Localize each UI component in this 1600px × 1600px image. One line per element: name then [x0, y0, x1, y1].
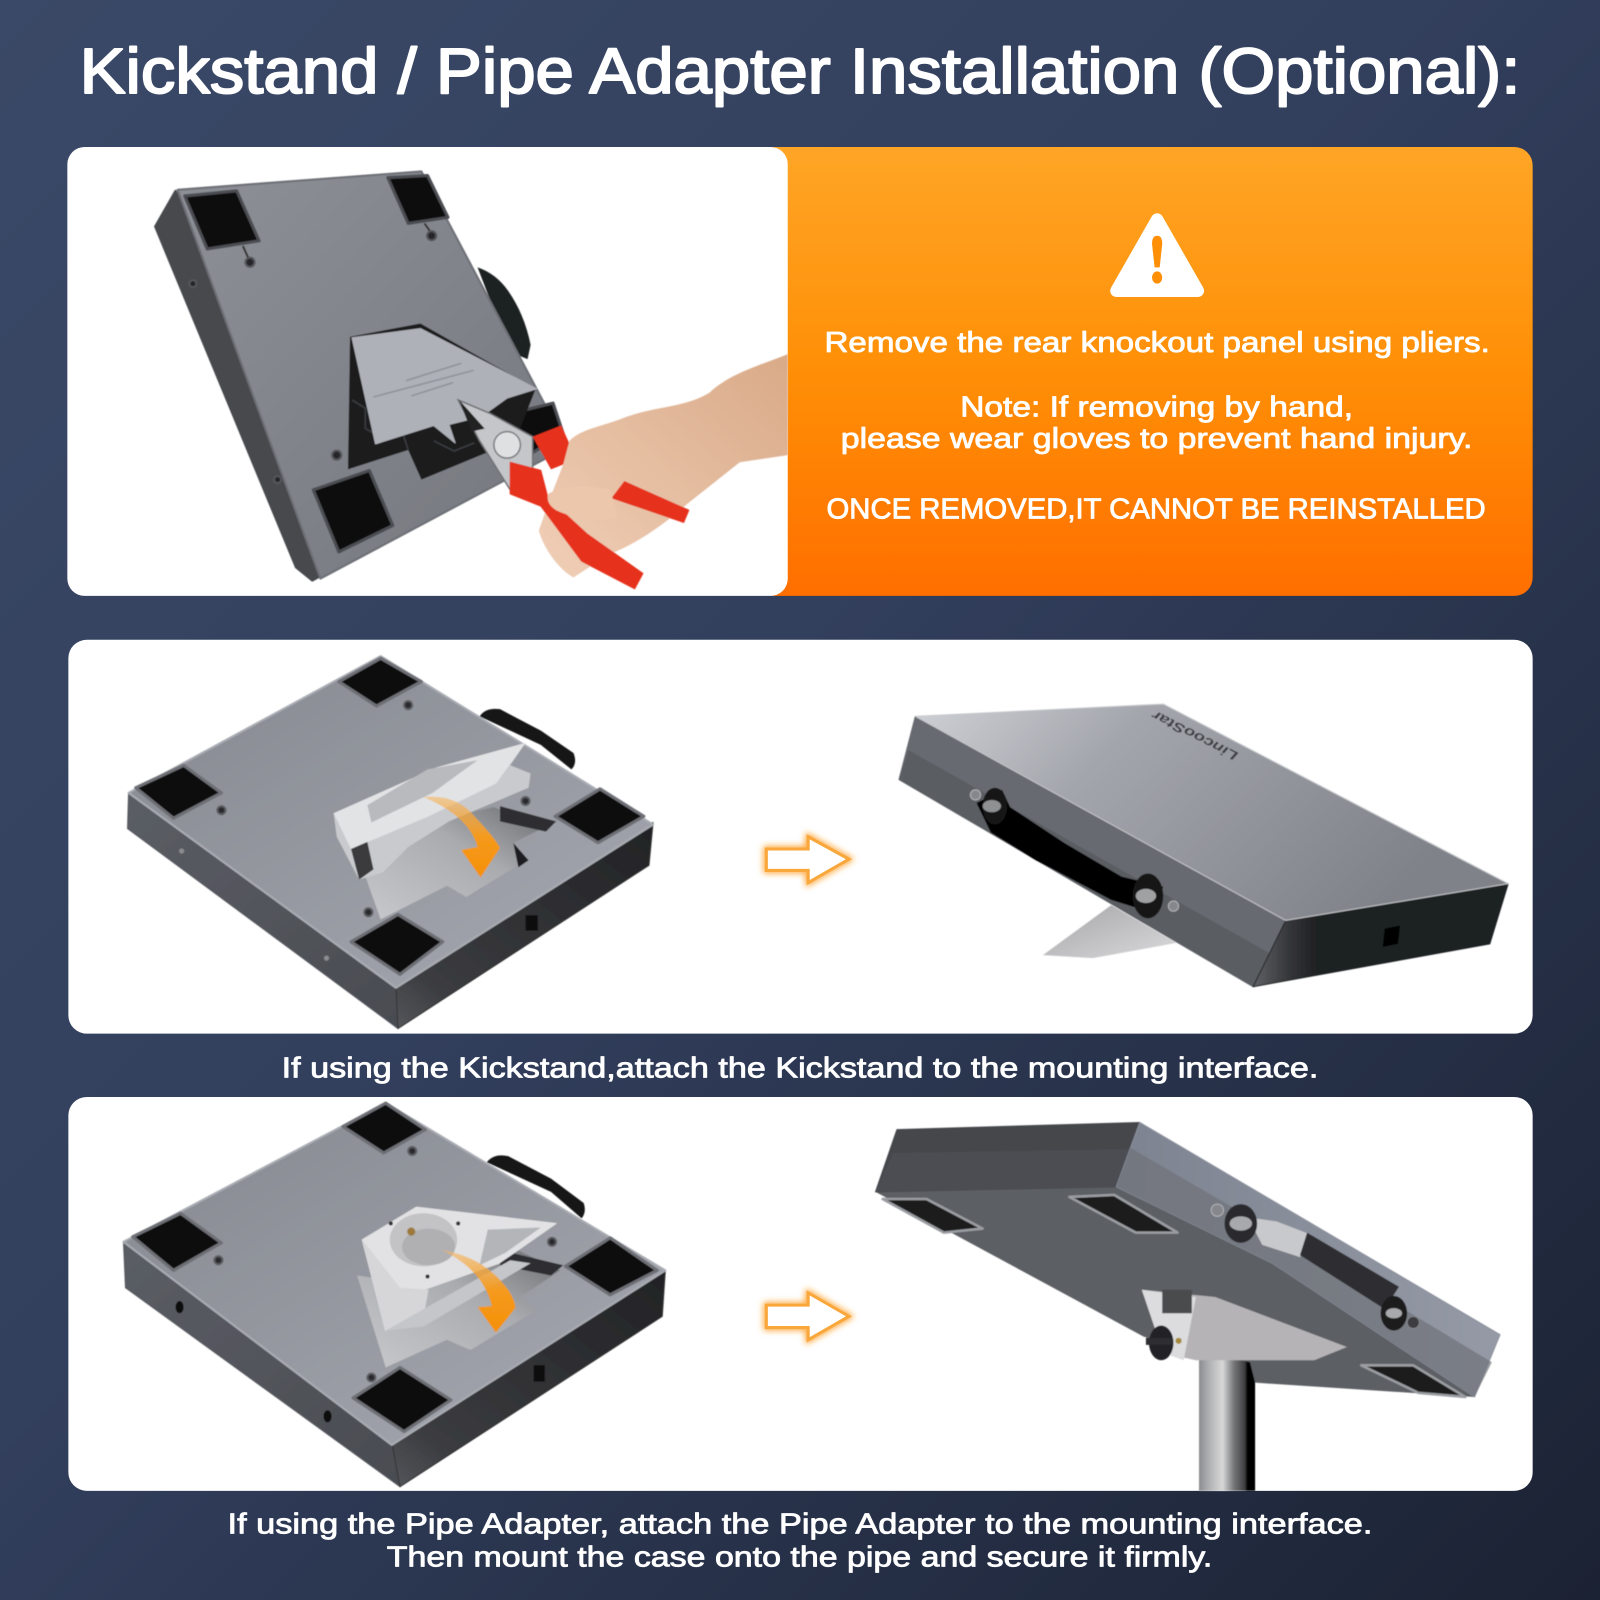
- white panel: [68, 640, 1533, 1034]
- case left side: [123, 1242, 400, 1487]
- panel: knockout removal: [67, 147, 788, 596]
- mount opening: [357, 1250, 560, 1367]
- screw holes: [214, 1147, 556, 1382]
- carry handle: [487, 1155, 585, 1218]
- rear opening: [348, 323, 536, 480]
- kickstand: [334, 743, 531, 880]
- flap embossed lines: [373, 363, 473, 397]
- adapter slot: [480, 1228, 541, 1265]
- adapter on pipe: [1142, 1290, 1347, 1360]
- carry strap: [1248, 1217, 1311, 1257]
- strap bolts: [970, 788, 1179, 918]
- hex pattern: [352, 400, 474, 451]
- screw holes: [217, 701, 530, 916]
- case top face: [915, 704, 1508, 920]
- case face: [129, 656, 653, 988]
- strap bolts: [1211, 1204, 1419, 1331]
- rubber pads: [136, 658, 644, 974]
- case front side: [899, 716, 1286, 987]
- carry handle: [480, 709, 575, 769]
- case end side: [1253, 884, 1508, 987]
- orange warning background: [755, 147, 1533, 596]
- device: case on pipe: [876, 1122, 1500, 1491]
- caption: kickstand: If using the Kickstand,attach the Kickstand to the mounting interface.: [282, 1053, 1318, 1085]
- locking knob: [1146, 1326, 1182, 1360]
- device: kickstand being attached: [128, 656, 653, 1029]
- kickstand leg: [1043, 905, 1177, 958]
- pliers head: [458, 400, 533, 490]
- pliers upper handle head: [533, 426, 577, 469]
- pipe adapter bracket: [362, 1207, 556, 1331]
- white panel: [68, 1097, 1533, 1491]
- adapter window: [1162, 1290, 1192, 1313]
- rubber pads: [133, 1103, 657, 1432]
- case face: [123, 1103, 665, 1445]
- device: case on kickstand: [899, 704, 1508, 987]
- case end side: [876, 1122, 1140, 1192]
- icon: warning triangle: [1116, 219, 1198, 291]
- warning text: [824, 327, 1490, 525]
- title: Kickstand / Pipe Adapter Installation (Optional):: [80, 35, 1520, 107]
- adapter pipe socket: [390, 1213, 457, 1266]
- caption: pipe adapter: If using the Pipe Adapter, attach the Pipe Adapter to the mounting interface.: [228, 1509, 1372, 1541]
- device: rear view with pliers: [155, 171, 788, 589]
- pipe: [1199, 1352, 1255, 1491]
- port: [534, 1365, 545, 1382]
- caption: pipe adapter: [228, 1509, 1372, 1573]
- case side: [155, 191, 337, 581]
- arrow: step: [766, 1293, 849, 1340]
- kickstand window: [367, 760, 478, 822]
- caption: pipe adapter: Then mount the case onto the pipe and secure it firmly.: [387, 1541, 1212, 1573]
- underside: [876, 1187, 1500, 1397]
- white panel: [67, 147, 788, 596]
- rubber pads: [185, 176, 563, 552]
- case left side: [128, 793, 398, 1029]
- thumb: [548, 487, 618, 519]
- case face: [178, 171, 567, 579]
- case right side: [396, 822, 653, 1029]
- carry strap: [977, 790, 1163, 913]
- panel: kickstand: [68, 640, 1533, 1034]
- rubber pads: [883, 1195, 1465, 1397]
- warning text: please wear gloves to prevent hand injury.: [841, 423, 1472, 455]
- device: pipe adapter being attached: [123, 1103, 665, 1487]
- case long side: [1116, 1122, 1500, 1397]
- knockout flap: [352, 329, 537, 444]
- port: [526, 915, 538, 931]
- warning text: Remove the rear knockout panel using pliers.: [824, 327, 1490, 359]
- adapter mount holes: [389, 1221, 460, 1279]
- rotation arrow: [442, 1250, 515, 1333]
- logo: LincooStar: [1149, 707, 1240, 764]
- hand: [539, 354, 788, 578]
- screw holes: [189, 231, 436, 483]
- pliers handles: [510, 462, 689, 589]
- panel: pipe adapter: [68, 1097, 1533, 1491]
- panel: warning: [755, 147, 1533, 596]
- warning text: ONCE REMOVED,IT CANNOT BE REINSTALLED: [827, 493, 1486, 525]
- warning text: Note: If removing by hand,: [960, 391, 1353, 423]
- case right side: [392, 1270, 665, 1487]
- arrow: step: [766, 837, 849, 883]
- mount opening: [362, 807, 546, 919]
- rotation arrow: [423, 797, 500, 878]
- handle behind case: [478, 267, 531, 359]
